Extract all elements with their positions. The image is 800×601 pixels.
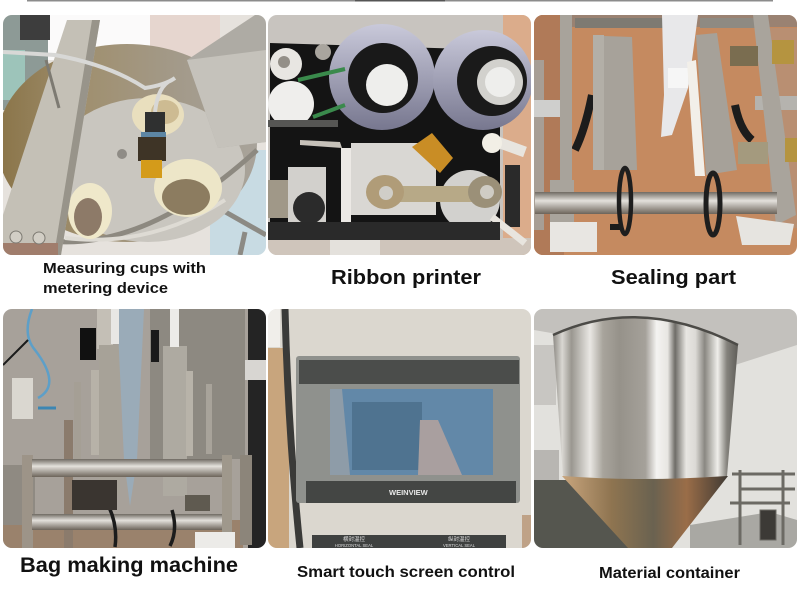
caption: measuring cups: Measuring cups with	[43, 260, 206, 277]
right ribbon spool	[433, 30, 533, 130]
white rollers	[268, 44, 331, 127]
left rail	[560, 15, 572, 180]
panel: sealing part photo	[534, 15, 797, 255]
panel: material container photo	[534, 309, 797, 548]
white pouch	[661, 15, 705, 176]
sensor cable	[3, 52, 175, 112]
O-rings	[619, 168, 720, 235]
lower rod	[32, 514, 222, 530]
hopper chute	[187, 15, 266, 148]
silver brackets	[268, 140, 436, 227]
caption: smart touch screen control: Smart touch screen control	[297, 564, 515, 581]
main shaft	[535, 192, 777, 214]
yellow sensor module	[412, 133, 453, 173]
blue air hose	[28, 309, 49, 398]
right upright	[163, 309, 212, 496]
panel: ribbon printer photo	[268, 15, 533, 255]
vertical seal label: VERTICAL SEAL	[443, 543, 476, 548]
panel: bag making machine photo	[3, 309, 266, 548]
horizontal seal label: HORIZONTAL SEAL	[335, 543, 374, 548]
hopper cone	[562, 476, 728, 548]
caption: measuring cups	[43, 260, 206, 297]
top rule	[27, 0, 773, 2]
black base plate	[270, 43, 500, 240]
caption: material container: Material container	[599, 565, 740, 582]
touch screen	[330, 389, 493, 475]
caption: ribbon printer: Ribbon printer	[331, 267, 481, 289]
hopper body	[553, 317, 738, 479]
caption: measuring cups: metering device	[43, 280, 168, 297]
yellow sensor	[138, 112, 166, 178]
right rail	[753, 15, 796, 225]
white feet	[550, 216, 794, 252]
caption: sealing part: Sealing part	[611, 267, 736, 289]
pneumatic valve	[12, 378, 33, 419]
metal bar	[3, 20, 100, 255]
panel: measuring cups photo	[0, 15, 266, 255]
left sealing block	[593, 35, 637, 170]
black side strip	[505, 165, 520, 227]
horizontal seal label: 横封温控	[343, 535, 365, 543]
stainless bowl	[0, 44, 257, 242]
horizontal seal label	[312, 535, 397, 548]
frame posts	[22, 420, 252, 548]
left upright	[91, 309, 113, 455]
dark cables	[108, 505, 175, 547]
left ribbon spool	[329, 24, 435, 130]
black brackets	[80, 328, 159, 362]
upper cup	[132, 94, 184, 136]
left cup	[68, 183, 112, 239]
vertical seal label: 纵封温控	[448, 535, 470, 543]
vertical seal label	[397, 535, 506, 548]
caption: bag making machine: Bag making machine	[20, 554, 238, 577]
black cable	[575, 95, 752, 150]
adjusting rod	[366, 170, 502, 222]
panel: touch screen photo	[268, 309, 531, 548]
HMI bezel	[296, 356, 520, 503]
WEINVIEW logo: WEINVIEW	[389, 488, 429, 497]
side rods	[534, 18, 797, 117]
background conveyor frame	[730, 470, 795, 545]
lower cup	[154, 159, 222, 217]
white side pins	[482, 133, 525, 243]
right sealing block	[696, 33, 737, 175]
clear film tube	[117, 309, 144, 506]
springs	[730, 40, 797, 164]
upper rod	[32, 459, 222, 477]
